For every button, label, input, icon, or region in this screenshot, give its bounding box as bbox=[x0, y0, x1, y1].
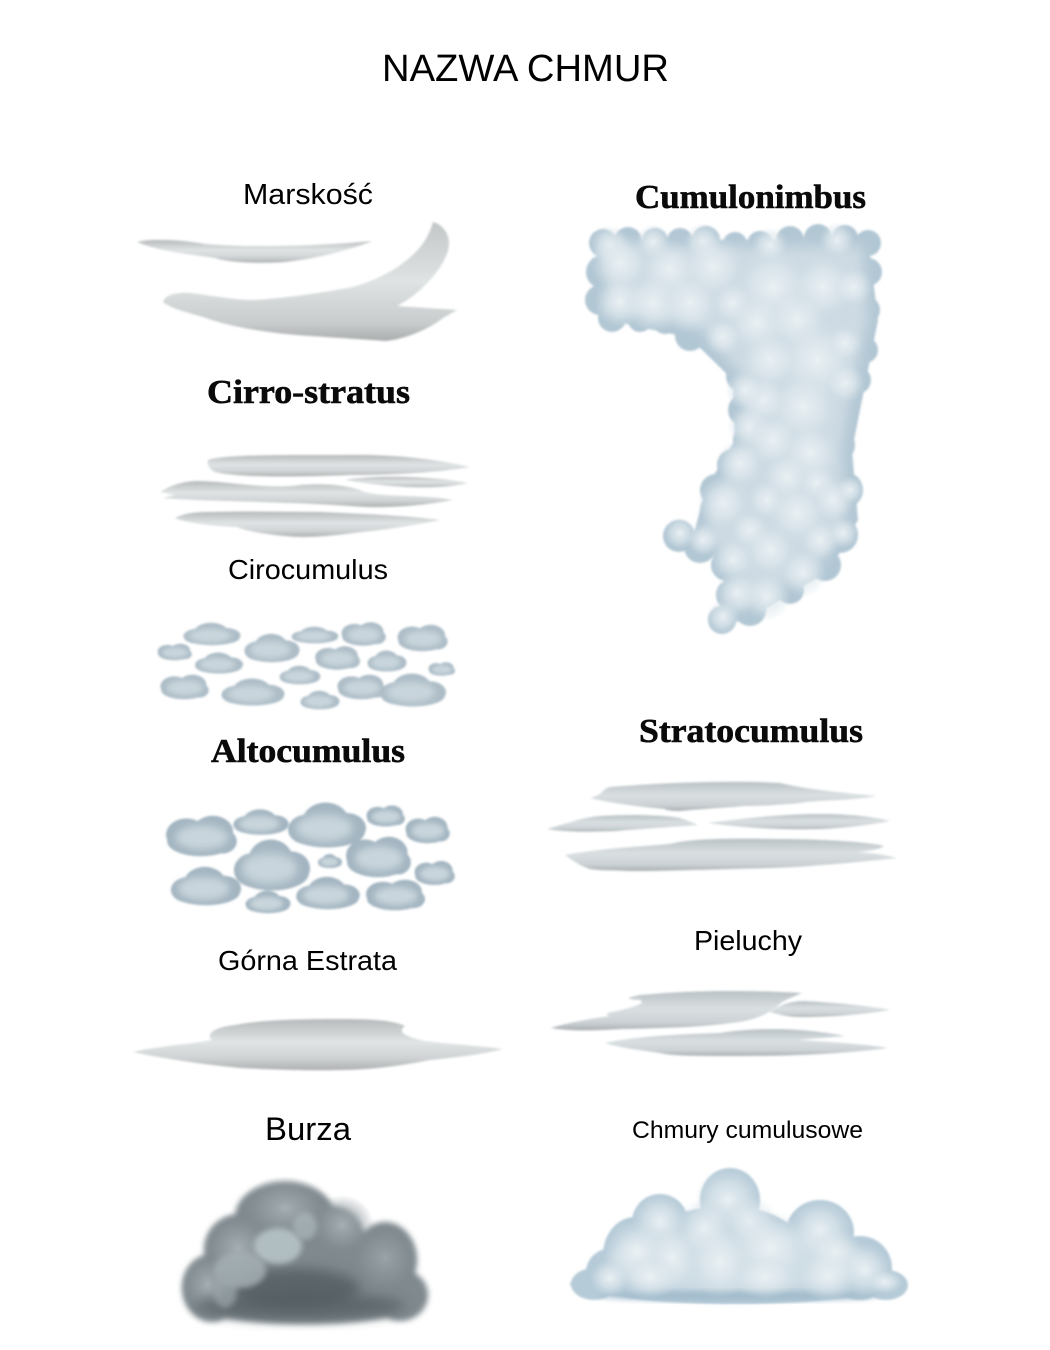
cloud: Cumulonimbus bbox=[585, 222, 882, 634]
heading: Pieluchy: Pieluchy bbox=[694, 925, 802, 956]
heading: Marskość: Marskość bbox=[243, 179, 373, 211]
cloud: Chmury cumulusowe bbox=[570, 1168, 908, 1304]
cloud: Altocumulus bbox=[166, 802, 455, 913]
heading: Górna Estrata: Górna Estrata bbox=[218, 945, 397, 976]
heading: Cirocumulus: Cirocumulus bbox=[228, 554, 388, 585]
cloud: Marskość bbox=[137, 222, 457, 341]
cloud: Górna Estrata bbox=[133, 1019, 503, 1070]
title: NAZWA CHMUR bbox=[382, 48, 669, 90]
heading: Cumulonimbus: Cumulonimbus bbox=[635, 179, 866, 216]
heading: Altocumulus: Altocumulus bbox=[211, 733, 405, 770]
heading: Stratocumulus: Stratocumulus bbox=[639, 713, 863, 750]
cloud: Cirro-stratus bbox=[160, 455, 470, 537]
cloud: Stratocumulus bbox=[547, 782, 897, 871]
cloud: Pieluchy bbox=[551, 991, 890, 1056]
heading: Chmury cumulusowe: Chmury cumulusowe bbox=[632, 1117, 863, 1144]
cloud: Cirocumulus bbox=[158, 622, 455, 709]
cloud: Burza bbox=[180, 1176, 428, 1324]
heading: Cirro-stratus: Cirro-stratus bbox=[207, 374, 410, 411]
heading: Burza: Burza bbox=[265, 1111, 351, 1147]
